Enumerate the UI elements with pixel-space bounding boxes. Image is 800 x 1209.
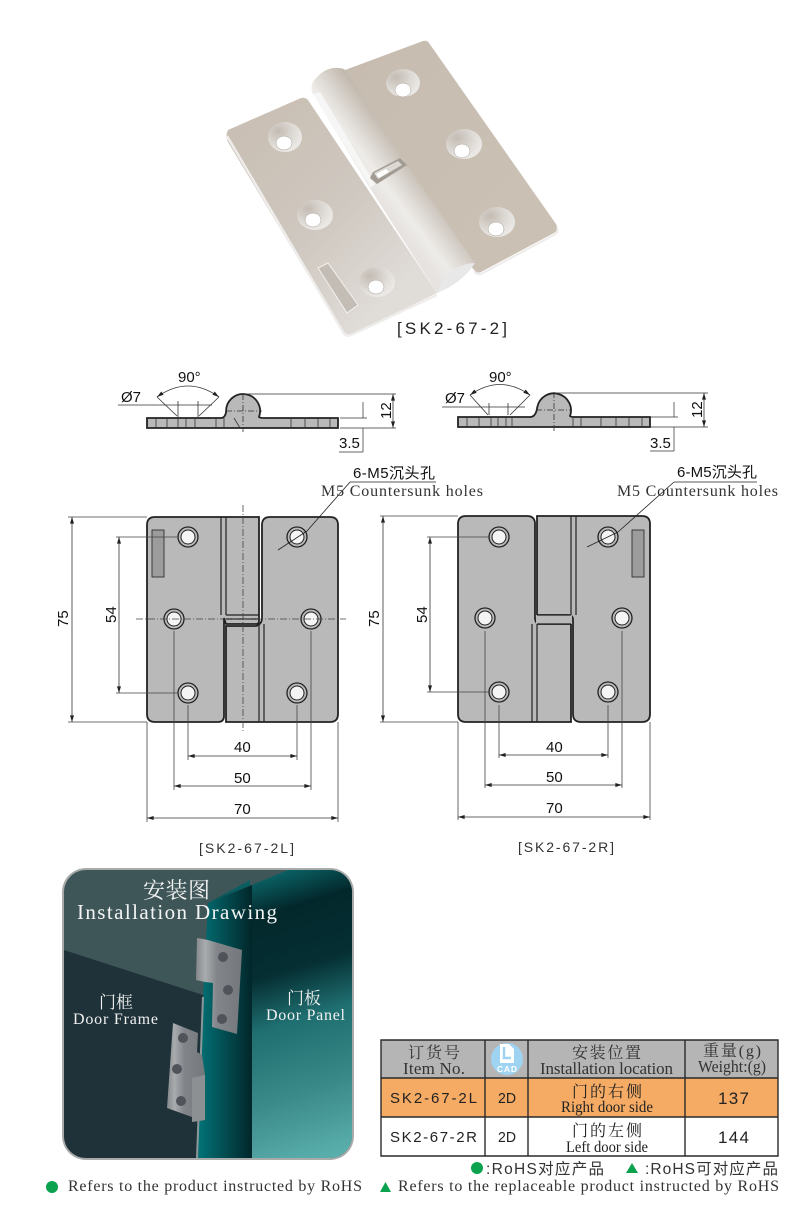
plan view: SK2-67-2R: 70 <box>546 800 563 817</box>
header labels <box>403 1042 766 1078</box>
row: SK2-67-2L: Right door side <box>561 1099 653 1116</box>
panel: installation drawing <box>62 868 354 1160</box>
label: door panel: 门板 <box>287 989 321 1008</box>
caption: SK2-67-2L: [SK2-67-2L] <box>199 840 294 856</box>
plan view: SK2-67-2R: 54 <box>414 606 431 623</box>
row: SK2-67-2R: 门的左侧 <box>572 1122 642 1140</box>
row: SK2-67-2L <box>390 1083 749 1116</box>
label: door panel: Door Panel <box>266 1007 346 1024</box>
row: SK2-67-2R <box>390 1122 749 1156</box>
upper hinge leaf <box>196 938 242 1034</box>
90 degree label: 90° <box>489 369 512 386</box>
door panel <box>208 870 352 1158</box>
label: door frame: 门框 <box>99 992 133 1012</box>
hinge body <box>147 517 259 722</box>
callout: right countersunk holes: 6-M5沉头孔 <box>677 464 757 481</box>
header labels: 订货号 <box>408 1044 460 1062</box>
barrel end cap <box>437 263 475 293</box>
callout: left countersunk holes: 6-M5沉头孔 <box>353 465 435 482</box>
mounting holes <box>475 527 632 702</box>
upper wall <box>64 870 352 1158</box>
CAD icon: CAD <box>497 1064 517 1074</box>
row: SK2-67-2R: 2D <box>498 1129 516 1146</box>
label: door frame <box>73 992 158 1028</box>
lower hinge leaf <box>167 1023 205 1122</box>
dimension lines <box>380 516 650 820</box>
plan view: SK2-67-2L: 54 <box>103 606 120 623</box>
heading: installation drawing: Installation Drawing <box>77 900 278 924</box>
row: SK2-67-2L: 137 <box>718 1089 749 1108</box>
plan view: SK2-67-2R: 40 <box>546 739 563 756</box>
header labels: Weight:(g) <box>698 1057 766 1076</box>
header labels: 重量(g) <box>703 1042 761 1060</box>
row: SK2-67-2R: Left door side <box>566 1139 648 1156</box>
plan view: SK2-67-2L <box>55 505 346 822</box>
hinge body <box>458 516 571 722</box>
dimension labels: 75 <box>366 610 383 627</box>
thickness label: 3.5 <box>650 435 671 452</box>
callout: left countersunk holes: M5 Countersunk holes <box>321 483 483 500</box>
callout: right countersunk holes: M5 Countersunk holes <box>617 483 778 500</box>
legend: RoHS Chinese: :RoHS对应产品 <box>486 1159 604 1178</box>
CAD icon <box>491 1043 523 1075</box>
right leaf <box>345 41 557 273</box>
height 12 label: 12 <box>689 401 706 418</box>
caption: SK2-67-2R: [SK2-67-2R] <box>518 839 614 855</box>
diameter label: Ø7 <box>121 389 141 406</box>
dimension lines <box>68 505 346 822</box>
table: ordering data <box>381 1040 778 1156</box>
legend: RoHS Chinese: :RoHS可对应产品 <box>645 1159 778 1178</box>
callout: right countersunk holes <box>587 464 778 547</box>
header labels: Installation location <box>540 1059 674 1078</box>
90 degree label: 90° <box>178 369 201 386</box>
brand plate <box>152 530 164 577</box>
callout: left countersunk holes <box>278 465 483 550</box>
plan view: SK2-67-2L: 40 <box>234 739 251 756</box>
dimension labels: 75 <box>55 610 72 627</box>
side view: SK2-67-2R <box>442 369 708 452</box>
side view: SK2-67-2L <box>118 369 396 452</box>
row: SK2-67-2L: 门的右侧 <box>572 1083 642 1101</box>
countersunk holes <box>268 69 515 297</box>
heading: installation drawing <box>77 878 278 924</box>
caption: SK2-67-2: [SK2-67-2] <box>397 319 507 338</box>
row: SK2-67-2L: 2D <box>498 1090 516 1107</box>
brand plate <box>318 263 358 313</box>
plan view: SK2-67-2L: 50 <box>234 770 251 787</box>
thickness label: 3.5 <box>339 435 360 452</box>
table header row <box>381 1040 778 1078</box>
row: SK2-67-2L: SK2-67-2L <box>390 1090 477 1107</box>
plan view: SK2-67-2R: 50 <box>546 769 563 786</box>
notch fill <box>536 615 572 624</box>
header labels: 安装位置 <box>572 1044 641 1062</box>
row: SK2-67-2R: SK2-67-2R <box>390 1129 477 1146</box>
legend: RoHS English: Refers to the replaceable product instructed by RoHS <box>398 1178 779 1195</box>
height 12 label: 12 <box>378 402 395 419</box>
door panel side strip <box>198 885 252 1158</box>
label: door frame: Door Frame <box>73 1011 158 1028</box>
mounting holes <box>164 527 321 703</box>
white row <box>381 1117 778 1156</box>
left leaf <box>226 98 437 336</box>
legend: RoHS English: Refers to the product instructed by RoHS <box>68 1178 362 1195</box>
hinge ring <box>370 158 407 184</box>
row: SK2-67-2R: 144 <box>718 1128 749 1147</box>
plan view: SK2-67-2L: 70 <box>234 801 251 818</box>
barrel <box>312 68 475 293</box>
diameter label: Ø7 <box>445 390 465 407</box>
highlighted row <box>381 1078 778 1117</box>
product photo: hinge <box>226 41 558 336</box>
barrel highlight <box>313 92 375 188</box>
legend: RoHS Chinese <box>471 1159 778 1178</box>
brand plate <box>632 530 644 577</box>
door frame <box>64 950 203 1160</box>
label: door panel <box>266 989 346 1024</box>
plan view: SK2-67-2R <box>366 516 650 820</box>
header labels: Item No. <box>403 1059 465 1078</box>
heading: installation drawing: 安装图 <box>143 878 210 903</box>
legend: RoHS English <box>46 1178 779 1195</box>
